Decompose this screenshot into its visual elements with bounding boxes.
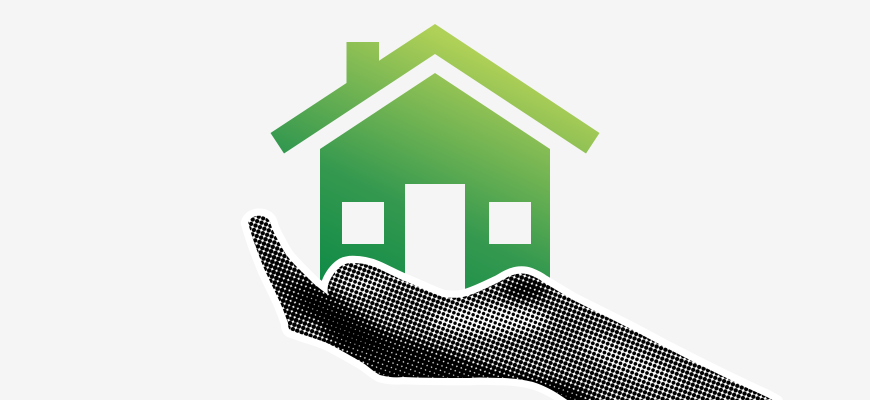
illustration: green house held on a halftone hand [241, 24, 782, 400]
icon: halftone hand [230, 200, 800, 400]
hand halftone shading [248, 216, 772, 400]
house body with door and windows cut out [320, 73, 550, 310]
house roof with chimney [270, 24, 600, 154]
icon: house [270, 24, 600, 310]
hand white outline [248, 216, 776, 400]
